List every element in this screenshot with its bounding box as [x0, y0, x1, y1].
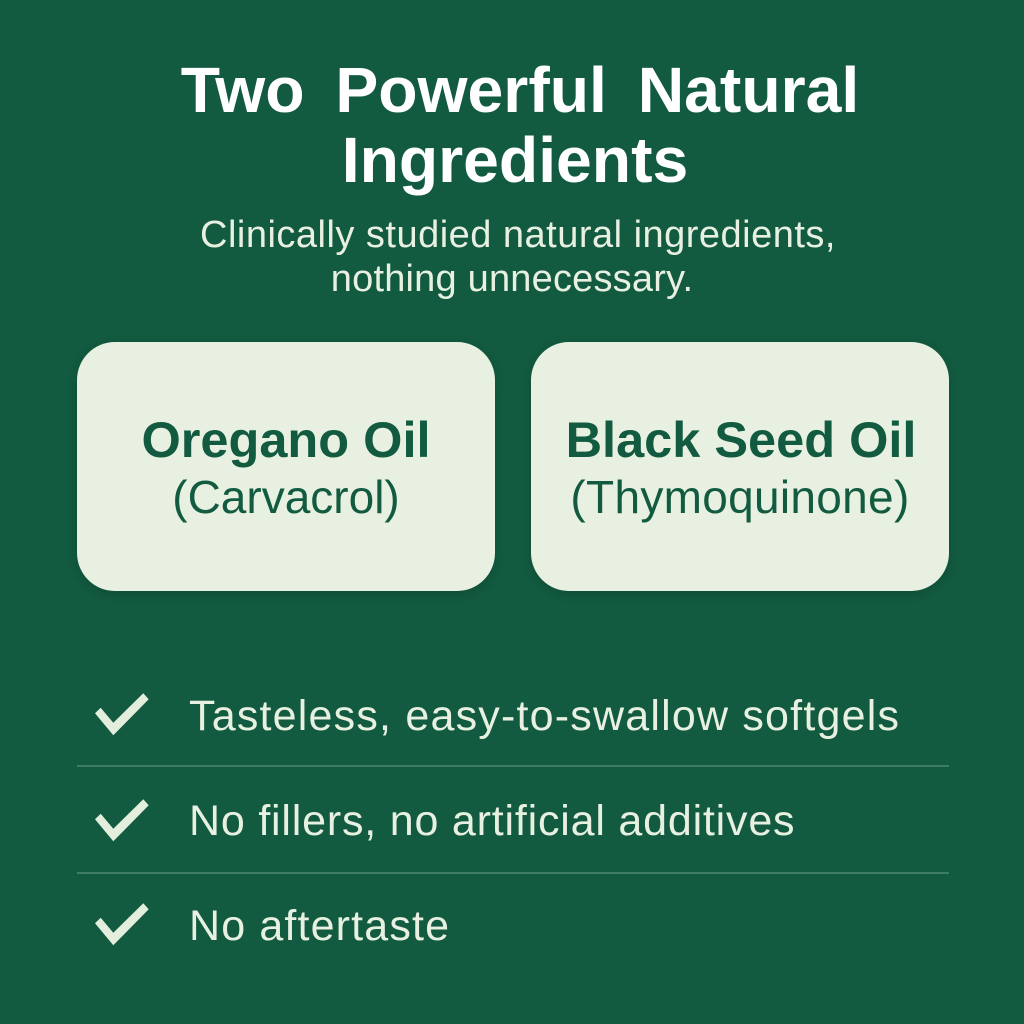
- subtitle: Clinically studied natural ingredients,: [200, 214, 836, 256]
- panel: black seed oil: [531, 342, 949, 591]
- oregano compound: (Carvacrol): [172, 471, 400, 523]
- subtitle: [200, 214, 836, 300]
- icon: check 1: [95, 693, 149, 736]
- benefit 3: No aftertaste: [189, 902, 450, 950]
- subtitle: nothing unnecessary.: [331, 258, 693, 300]
- title: [181, 54, 859, 196]
- oregano heading: Oregano Oil: [141, 411, 431, 468]
- black seed heading: Black Seed Oil: [566, 411, 916, 468]
- title: Two Powerful Natural: [181, 54, 859, 126]
- title: Ingredients: [342, 124, 688, 196]
- icon: check 2: [95, 799, 149, 842]
- black seed compound: (Thymoquinone): [570, 471, 910, 523]
- panel: oregano oil: [77, 342, 495, 591]
- icon: check 3: [95, 903, 149, 946]
- benefit 1: Tasteless, easy-to-swallow softgels: [189, 692, 900, 740]
- benefit 2: No fillers, no artificial additives: [189, 797, 795, 845]
